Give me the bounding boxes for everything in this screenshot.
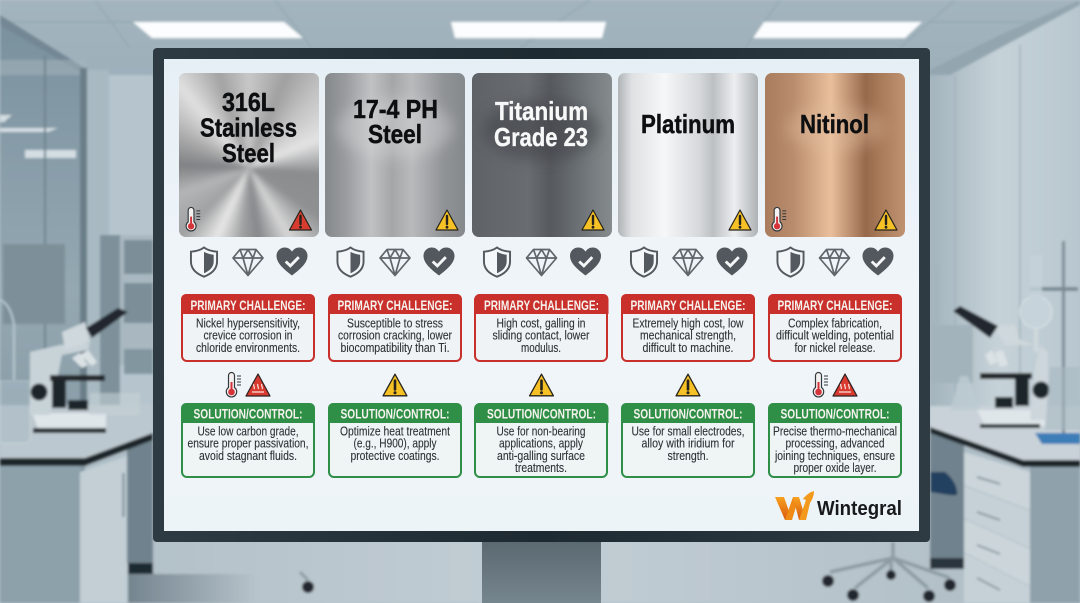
challenge panel: Platinum: PRIMARY CHALLENGE: [630,297,746,313]
icon: yellow warning [582,210,604,230]
solution panel: 316L [181,403,315,477]
challenge panel: Nitinol: PRIMARY CHALLENGE: [778,297,892,313]
card title [483,96,599,160]
solution panel: 316L: Use low carbon grade, [198,424,298,439]
material card: 316L [179,73,319,237]
solution panel: Platinum [621,403,755,477]
material card: Platinum [618,73,758,237]
challenge panel: Nitinol [768,294,902,361]
ceiling lights [133,22,922,38]
solution panel: Nitinol: Precise thermo-mechanical [773,424,897,439]
right bench with microscope [930,241,1080,603]
solution panel: 316L: SOLUTION/CONTROL: [194,406,302,422]
connector icons: Nitinol [813,372,857,397]
icon: yellow warning [436,210,458,230]
solution panel: Nitinol: SOLUTION/CONTROL: [780,406,890,422]
connector icon: Titanium warning [530,374,553,396]
property icons row [191,247,893,277]
challenge panel: Platinum: difficult to machine. [642,340,734,355]
card title: Grade 23 [494,122,588,152]
solution panel: Platinum: alloy with iridium for [642,436,735,451]
column: 316L Stainless Steel [179,73,319,237]
monitor screen [164,59,919,531]
card title [200,87,297,168]
card title [337,94,453,158]
connector icon: Platinum warning [676,374,700,396]
chair legs and casters [300,542,956,602]
icon: W mark [775,491,814,520]
challenge panel: Nitinol: for nickel release. [794,340,876,355]
challenge panel: 17-4 PH: Susceptible to stress [347,316,443,330]
left bench with microscope [0,300,153,603]
card title: Titanium [495,96,588,126]
challenge panel: 17-4 PH [328,294,462,361]
challenge panel: Platinum [621,294,755,361]
challenge panel: Titanium: sliding contact, lower [492,328,590,343]
challenge panel: Titanium: PRIMARY CHALLENGE: [484,297,599,313]
challenge panel: Titanium [474,294,608,361]
solution panel: Nitinol: proper oxide layer. [794,460,876,475]
icon: red warning [290,210,312,230]
connector icons: 316L [226,372,270,397]
solution panel: Titanium: SOLUTION/CONTROL: [487,406,596,422]
solution panel: 17-4 PH: Optimize heat treatment [340,424,450,439]
card title: Stainless [200,112,297,142]
solution panel: 316L: avoid stagnant fluids. [199,448,297,463]
card title: Steel [222,138,275,168]
floor and baseboards [0,540,1080,603]
monitor stand [482,540,601,603]
solution panel: Titanium: anti-galling surface [497,448,585,463]
solution panel: Nitinol [768,403,902,477]
solution panel: 17-4 PH: protective coatings. [350,448,440,463]
solution panel: Platinum: strength. [668,448,708,463]
connector icon: 17-4 PH warning [383,374,407,396]
column: Nitinol [765,73,905,237]
icon: thermometer [186,207,200,231]
solution panel: Titanium: applications, apply [499,436,583,451]
icon: thermometer [772,207,786,231]
challenge panel: Titanium: modulus. [521,340,561,355]
material card: Titanium [472,73,612,237]
challenge panel: Titanium: High cost, galling in [496,316,586,330]
right wall [930,0,1080,440]
solution panel: 316L: ensure proper passivation, [188,436,308,451]
challenge panel: 316L: Nickel hypersensitivity, [196,316,300,330]
challenge panel: 316L: PRIMARY CHALLENGE: [190,297,306,313]
card title: Nitinol [800,109,869,139]
solution panel: Nitinol: joining techniques, ensure [774,448,895,463]
challenge panel: 17-4 PH: PRIMARY CHALLENGE: [338,297,452,313]
solution panel: Nitinol: processing, advanced [786,436,884,451]
logo: Wintegral: Wintegral [817,498,902,520]
solution panel: 17-4 PH: (e.g., H900), apply [354,436,437,451]
card title [785,106,885,150]
challenge panel: 17-4 PH: corrosion cracking, lower [338,328,453,343]
solution panel: 17-4 PH [328,403,462,477]
solution panel: Platinum: SOLUTION/CONTROL: [634,406,742,422]
challenge panel: 17-4 PH: biocompatibility than Ti. [340,340,450,355]
challenge panel: Platinum: Extremely high cost, low [632,316,744,330]
material card: 17-4 PH [325,73,465,237]
column: Titanium Grade 23 [472,73,612,237]
challenge panel: 316L [181,294,315,361]
solution panel: Titanium: treatments. [515,460,567,475]
solution panel: Platinum: Use for small electrodes, [632,424,744,439]
card title: 17-4 PH [353,94,438,124]
column: Platinum [618,73,758,237]
card title: Steel [368,119,422,149]
left glass wall [0,20,85,560]
solution panel: Titanium: Use for non-bearing [496,424,586,439]
icon: yellow warning [875,210,897,230]
logo: Wintegral [775,491,902,520]
challenge panel: 316L: chloride environments. [196,340,300,355]
column: 17-4 PH Steel [325,73,465,237]
challenge panel: Nitinol: Complex fabrication, [788,316,882,330]
challenge panel: Nitinol: difficult welding, potential [776,328,894,343]
card title: Platinum [641,109,735,139]
solution panel: 17-4 PH: SOLUTION/CONTROL: [340,406,450,422]
challenge panel: Platinum: mechanical strength, [640,328,736,343]
challenge panel: 316L: crevice corrosion in [204,328,292,343]
material card: Nitinol [765,73,905,237]
solution panel: Titanium [474,403,608,477]
icon: yellow warning [729,210,751,230]
card title: 316L [222,87,275,117]
monitor bezel [153,48,930,542]
